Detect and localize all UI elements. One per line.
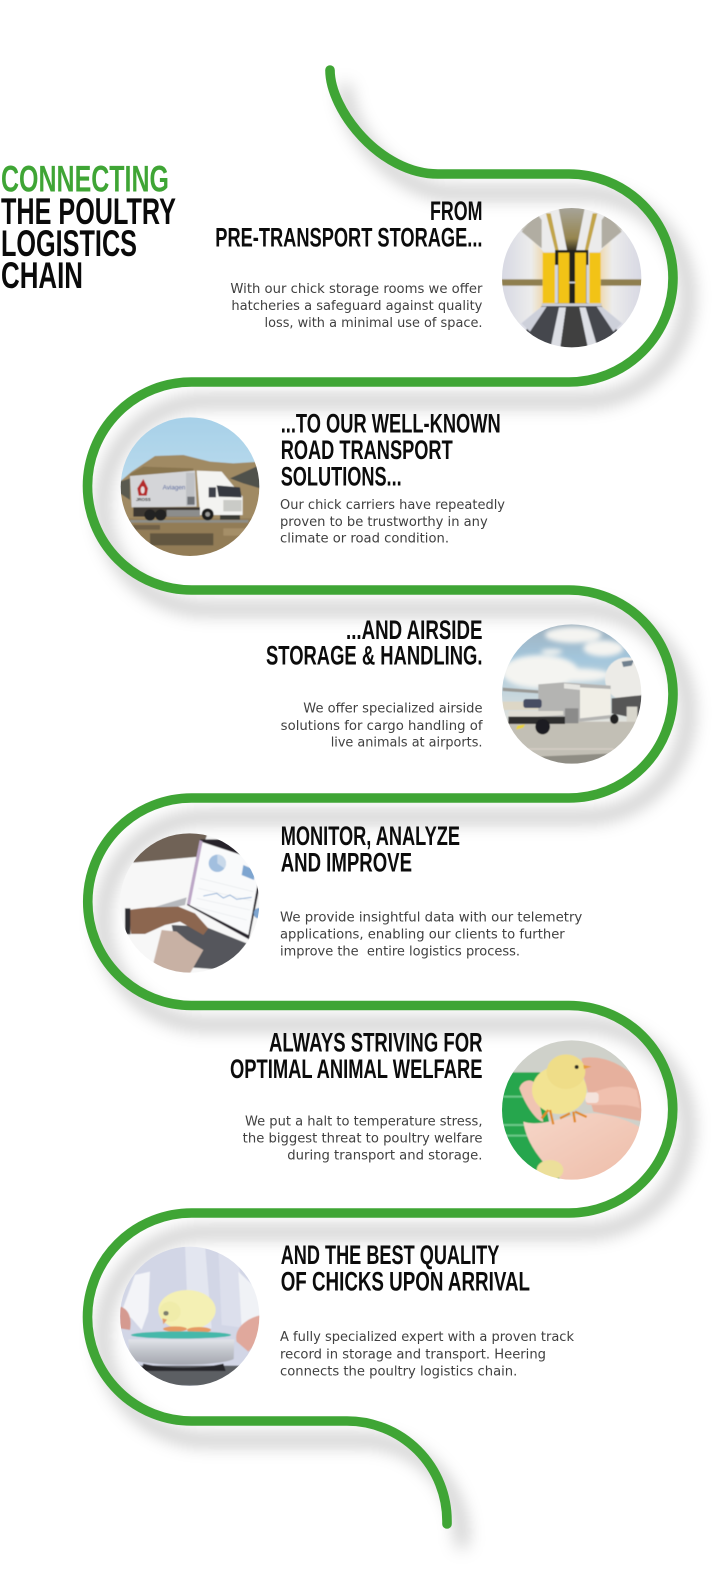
title: THE POULTRY: [1, 191, 176, 232]
text: specialized expert: A fully specialized expert with a proven track: [280, 1330, 574, 1345]
heading: airside storage and handling: STORAGE & HANDLING.: [266, 641, 482, 671]
heading: best quality of chicks upon arrival: AND THE BEST QUALITY: [281, 1240, 500, 1270]
heading: well-known road transport solutions: ...TO OUR WELL-KNOWN: [281, 409, 501, 439]
title: LOGISTICS: [1, 223, 137, 264]
panel: best quality of chicks upon arrival: [118, 1240, 574, 1388]
panel: monitor, analyze and improve: [118, 821, 583, 973]
heading: airside storage and handling: ...AND AIRSIDE: [346, 615, 482, 645]
text: temperature stress: We put a halt to temperature stress,: [245, 1114, 482, 1129]
text: chick carriers: climate or road condition.: [280, 532, 449, 547]
text: telemetry applications: We provide insightful data with our telemetry: [280, 911, 583, 926]
heading: monitor, analyze and improve: AND IMPROVE: [281, 848, 412, 878]
text: temperature stress: the biggest threat to poultry welfare: [243, 1131, 482, 1146]
text: temperature stress: [243, 1114, 482, 1163]
text: chick carriers: [280, 498, 505, 547]
heading: well-known road transport solutions: ROAD TRANSPORT: [281, 435, 453, 465]
photo: chick held in hands: [500, 1038, 643, 1182]
text: telemetry applications: applications, enabling our clients to further: [280, 928, 565, 943]
heading: optimal animal welfare: OPTIMAL ANIMAL WELFARE: [230, 1054, 482, 1084]
title: [1, 159, 176, 296]
heading: airside storage and handling: [266, 615, 482, 671]
text: specialized expert: [280, 1330, 574, 1379]
title: CONNECTING: [1, 159, 169, 200]
winding green route line with shadow: [88, 70, 688, 1543]
photo: white truck in a landscape: Aviagen: [163, 484, 186, 491]
text: airside solutions: [281, 702, 483, 751]
heading: monitor, analyze and improve: [281, 821, 460, 878]
heading: best quality of chicks upon arrival: [281, 1240, 530, 1297]
heading: well-known road transport solutions: SOLUTIONS...: [281, 461, 402, 491]
text: chick carriers: Our chick carriers have repeatedly: [280, 498, 505, 513]
text: airside solutions: solutions for cargo handling of: [281, 719, 483, 734]
panel: road transport: [117, 409, 505, 562]
text: chick storage rooms: With our chick storage rooms we offer: [230, 282, 483, 297]
photo: white truck in a landscape: JROSS: [136, 497, 151, 502]
title: CHAIN: [1, 255, 83, 296]
text: chick storage rooms: hatcheries a safeguard against quality: [231, 299, 483, 314]
photo: chick on a weighing scale: [118, 1245, 262, 1388]
text: telemetry applications: [280, 911, 583, 960]
text: specialized expert: record in storage and transport. Heering: [280, 1347, 546, 1362]
text: airside solutions: We offer specialized airside: [303, 702, 482, 717]
photo: white truck in a landscape: [120, 417, 260, 556]
photo: hands typing on a laptop with charts: [118, 830, 265, 973]
text: airside solutions: live animals at airports.: [331, 736, 482, 751]
photo: airside cargo vehicle beside aircraft: [502, 624, 642, 764]
panel: airside storage and handling: [266, 615, 648, 768]
panel: optimal animal welfare: [230, 1028, 643, 1182]
heading: well-known road transport solutions: [281, 409, 501, 491]
panel: pre-transport storage: [215, 196, 643, 350]
photo: storage room with yellow crates: [500, 207, 643, 350]
heading: from pre-transport storage: [215, 196, 483, 253]
text: chick storage rooms: [230, 282, 483, 331]
text: specialized expert: connects the poultry logistics chain.: [280, 1364, 517, 1379]
heading: optimal animal welfare: ALWAYS STRIVING FOR: [269, 1028, 482, 1058]
heading: best quality of chicks upon arrival: OF CHICKS UPON ARRIVAL: [281, 1267, 530, 1297]
heading: monitor, analyze and improve: MONITOR, ANALYZE: [281, 821, 460, 851]
text: chick carriers: proven to be trustworthy in any: [280, 515, 488, 530]
heading: from pre-transport storage: FROM: [430, 196, 482, 226]
text: telemetry applications: improve the entire logistics process.: [280, 945, 520, 960]
text: temperature stress: during transport and storage.: [287, 1148, 482, 1163]
heading: from pre-transport storage: PRE-TRANSPORT STORAGE...: [215, 223, 483, 253]
text: chick storage rooms: loss, with a minimal use of space.: [264, 316, 482, 331]
heading: optimal animal welfare: [230, 1028, 482, 1084]
